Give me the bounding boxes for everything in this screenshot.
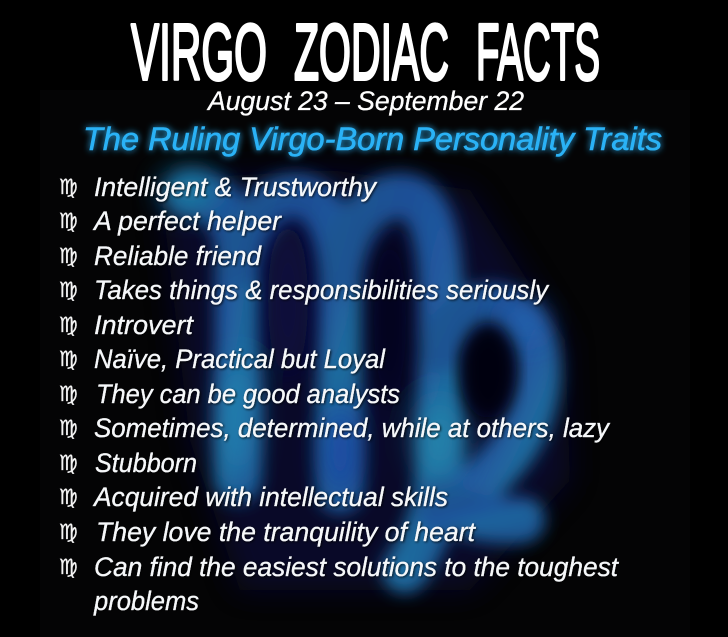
trait 12: problems	[93, 586, 199, 616]
colour mottling	[160, 168, 549, 495]
trait 6: ♍	[59, 347, 78, 371]
title: VIRGO	[131, 8, 267, 96]
trait 10: Acquired with intellectual skills	[92, 482, 448, 512]
trait 7: ♍	[59, 382, 78, 406]
trait 11: They love the tranquility of heart	[96, 517, 476, 547]
trait 12: ♍	[59, 555, 78, 579]
background: blurred virgo symbol	[160, 168, 570, 590]
trait 12	[59, 552, 619, 616]
trait 1: Intelligent & Trustworthy	[94, 172, 377, 202]
trait 7: They can be good analysts	[96, 379, 400, 409]
text: FACTS	[476, 8, 600, 96]
trait 9: Stubborn	[95, 448, 197, 478]
trait 6: Naïve, Practical but Loyal	[94, 344, 386, 374]
trait 8: ♍	[59, 416, 78, 440]
trait 5: ♍	[59, 313, 78, 337]
trait 4: Takes things & responsibilities seriously	[94, 275, 549, 305]
trait 5: Introvert	[94, 310, 194, 340]
trait 1: ♍	[59, 175, 78, 199]
title	[131, 8, 600, 96]
trait 10: ♍	[59, 485, 78, 509]
trait 4: ♍	[59, 278, 78, 302]
trait 2: A perfect helper	[92, 206, 282, 236]
trait list	[59, 172, 619, 616]
trait 3: ♍	[59, 244, 78, 268]
trait 3: Reliable friend	[94, 241, 262, 271]
date range: August 23 – September 22	[206, 86, 524, 116]
trait 2: ♍	[59, 209, 78, 233]
trait 8: Sometimes, determined, while at others, lazy	[94, 413, 610, 443]
trait 11: ♍	[59, 520, 78, 544]
subtitle: The Ruling Virgo-Born Personality Traits	[83, 121, 662, 157]
trait 9: ♍	[59, 451, 78, 475]
title: ZODIAC	[294, 8, 449, 96]
background panel	[40, 90, 690, 637]
trait 12: Can find the easiest solutions to the toughest	[94, 552, 619, 582]
